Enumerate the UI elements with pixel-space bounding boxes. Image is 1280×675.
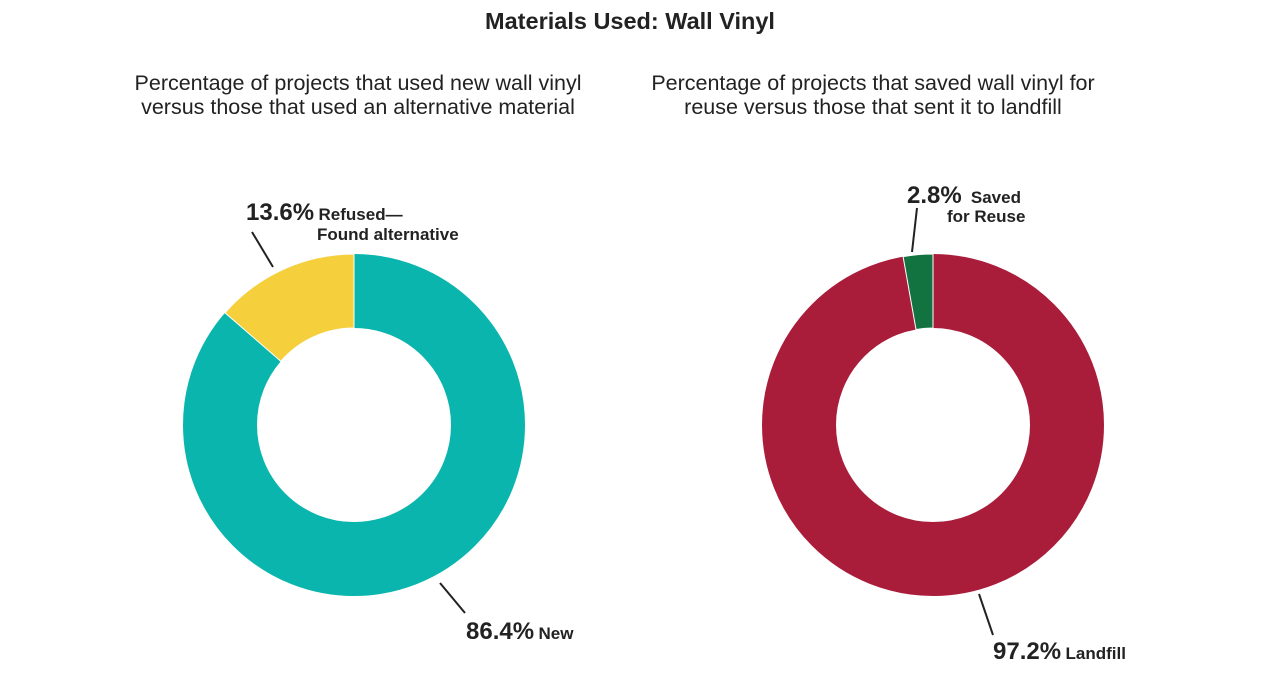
- label: 2.8% saved for reuse: 2.8% Saved: [907, 182, 1021, 209]
- donut: reuse vs landfill: [799, 254, 1067, 559]
- leader lines: [252, 208, 993, 635]
- label: 86.4% new: 86.4% New: [466, 618, 573, 645]
- label: found alternative: Found alternative: [317, 225, 459, 244]
- label: 13.6% refused: 13.6% Refused—: [246, 199, 403, 226]
- subtitle: right chart: reuse versus those that sent it to landfill: [684, 95, 1062, 119]
- subtitle: left chart: Percentage of projects that used new wall vinyl: [135, 71, 581, 95]
- donut: new vs alternative: [220, 254, 488, 559]
- label: 97.2% landfill: 97.2% Landfill: [993, 638, 1126, 665]
- subtitle: left chart: versus those that used an alternative material: [141, 95, 575, 119]
- title: Materials Used: Wall Vinyl: [485, 8, 775, 34]
- subtitle: right chart: Percentage of projects that saved wall vinyl for: [651, 71, 1095, 95]
- subtitle: right chart: [651, 71, 1095, 119]
- label: for reuse: for Reuse: [947, 207, 1025, 226]
- subtitle: left chart: [135, 71, 581, 119]
